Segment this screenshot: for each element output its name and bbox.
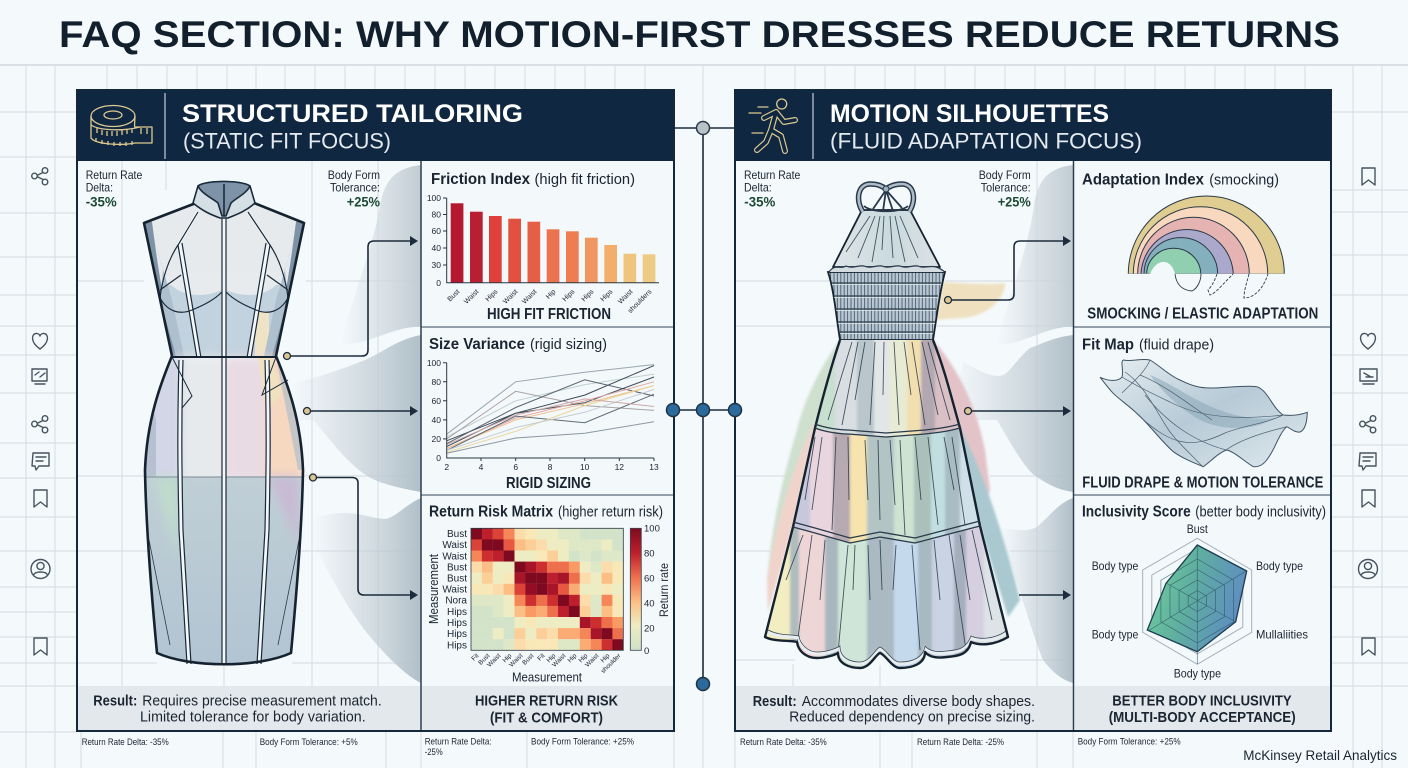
chart: friction index: 30 <box>432 260 441 270</box>
panel: structured tailoring <box>77 90 674 731</box>
source credit: McKinsey Retail Analytics <box>1243 747 1397 763</box>
header heading: MOTION SILHOUETTES <box>830 100 1109 128</box>
illustration: fit map: (fluid drape) <box>1139 336 1214 353</box>
chart: return risk matrix: 40 <box>644 598 655 610</box>
chart: size variance: 6 <box>513 462 518 472</box>
chart: return risk matrix: Hip <box>567 652 579 664</box>
chart: size variance: 10 <box>580 462 590 472</box>
chart: return risk matrix: Return rate <box>657 563 671 617</box>
chart: size variance <box>427 336 659 492</box>
chart: inclusivity score radar: Inclusivity Score <box>1082 504 1191 521</box>
chart: adaptation index: SMOCKING / ELASTIC ADAPTATION <box>1087 306 1318 323</box>
left margin icons <box>31 168 50 655</box>
chart: size variance: RIGID SIZING <box>506 475 591 492</box>
header heading <box>830 100 1142 153</box>
chart: return risk matrix: Bust <box>447 562 467 574</box>
chart: friction index <box>427 171 659 323</box>
chart: inclusivity score radar: Body type <box>1092 627 1139 641</box>
chart: return risk matrix: Waist <box>508 652 525 669</box>
chart: return risk matrix: Bust <box>447 574 467 584</box>
chart: return risk matrix: Waist <box>442 552 467 562</box>
illustration: structured dress <box>140 182 310 672</box>
chart: return risk matrix: Bust <box>477 652 492 667</box>
chart: return risk matrix: Bust <box>447 529 467 540</box>
chart: friction index: Hips <box>562 288 577 303</box>
chart: friction index: 60 <box>432 226 441 236</box>
chart: adaptation index: (smocking) <box>1209 171 1279 188</box>
chart: return risk matrix: Hips <box>447 629 467 640</box>
metric: return rate delta <box>86 168 143 210</box>
seam highlights <box>178 206 270 664</box>
chart: return risk matrix: Fit <box>536 652 547 663</box>
chart: return risk matrix: Hips <box>447 607 467 618</box>
verdict band right: BETTER BODY INCLUSIVITY <box>1112 693 1292 710</box>
result band right <box>736 686 1073 730</box>
metric: return rate delta: -35% <box>86 194 117 210</box>
seams <box>160 206 288 664</box>
chart: friction index: Hips <box>600 288 615 303</box>
footer metrics: Return Rate Delta: -35% <box>82 737 169 748</box>
footer metrics <box>82 736 1181 758</box>
chart: size variance: 60 <box>432 396 441 406</box>
footer metrics: Body Form Tolerance: +25% <box>1078 736 1181 747</box>
chart: friction index: Waist <box>521 288 538 306</box>
chart: return risk matrix: Hip <box>578 652 590 664</box>
chart: size variance: 8 <box>548 462 553 472</box>
chart: inclusivity score radar: Body type <box>1174 666 1221 680</box>
footer metrics: -25% <box>425 747 443 758</box>
chart: return risk matrix: Hips <box>447 640 467 652</box>
chart: return risk matrix: 20 <box>644 624 655 634</box>
chart: return risk matrix: Waist <box>442 540 467 551</box>
chart: return risk matrix: Bust <box>521 652 536 667</box>
chart: friction index: Hips <box>581 288 596 303</box>
result band left: Result: <box>93 694 137 710</box>
chart: friction index: Waist <box>463 288 480 306</box>
panel header <box>735 90 1331 161</box>
chart: return risk matrix: 0 <box>644 646 649 657</box>
bodice <box>833 210 940 267</box>
chart: friction index: 100 <box>427 193 441 203</box>
chart: friction index: Friction Index <box>431 171 530 188</box>
chart: return risk matrix: Fit <box>470 652 481 663</box>
result band right: Accommodates diverse body shapes. <box>802 694 1035 710</box>
callout connectors right <box>944 236 1071 600</box>
callout connectors left <box>284 236 418 600</box>
chart: return risk matrix: Hip <box>600 652 612 664</box>
chart: return risk matrix: Hip <box>502 652 514 664</box>
back layers <box>767 282 1020 617</box>
arcs <box>1128 196 1284 274</box>
halter neck <box>859 184 913 212</box>
icon: running figure <box>749 99 795 151</box>
chart: return risk matrix: Return Risk Matrix <box>429 504 553 521</box>
panel: motion silhouettes <box>735 90 1331 731</box>
chart: return risk matrix: Hips <box>447 618 467 629</box>
smocking band <box>828 266 945 340</box>
header heading: (FLUID ADAPTATION FOCUS) <box>830 128 1142 153</box>
metric: body form tolerance <box>328 168 381 210</box>
metric: body form tolerance: Tolerance: <box>981 180 1031 194</box>
chart: size variance: 20 <box>432 434 441 444</box>
icon: measuring tape <box>91 106 152 146</box>
chart: adaptation index <box>1082 171 1318 323</box>
illustration: fit map: FLUID DRAPE & MOTION TOLERANCE <box>1082 475 1323 492</box>
metric: body form tolerance: Body Form <box>328 168 380 182</box>
collar <box>193 182 255 218</box>
metric: return rate delta <box>744 168 801 210</box>
chart: friction index: Hip <box>545 288 557 301</box>
chart: size variance: 40 <box>432 415 441 425</box>
metric: body form tolerance <box>979 168 1031 210</box>
header heading: STRUCTURED TAILORING <box>182 100 523 128</box>
skirt tier two <box>794 429 978 542</box>
chart: friction index: Bust <box>447 288 461 303</box>
chart: friction index: 80 <box>432 210 441 220</box>
chart: size variance: 2 <box>444 462 449 472</box>
chart: return risk matrix: 80 <box>644 548 655 560</box>
result band right: Result: <box>753 694 797 710</box>
chart: return risk matrix: Waist <box>442 584 467 596</box>
chart: return risk matrix: 100 <box>644 524 660 534</box>
verdict band right: (MULTI-BODY ACCEPTANCE) <box>1109 709 1296 726</box>
chart: return risk matrix <box>427 504 671 684</box>
verdict band left: HIGHER RETURN RISK <box>475 693 618 710</box>
footer metrics: Return Rate Delta: -25% <box>917 737 1004 748</box>
chart: size variance: 80 <box>432 377 441 387</box>
chart: friction index: Waist <box>502 288 519 306</box>
chart: size variance: 0 <box>436 453 441 463</box>
chart: return risk matrix: Waist <box>486 652 503 669</box>
verdict band right <box>1075 686 1330 730</box>
right margin icons <box>1358 168 1378 655</box>
illustration: halter tiered dress <box>760 184 1020 675</box>
chart: friction index: Hips <box>485 288 500 303</box>
verdict band left <box>422 686 673 730</box>
chart: size variance: 4 <box>479 462 484 472</box>
chart: size variance: 13 <box>649 462 659 472</box>
header heading: (STATIC FIT FOCUS) <box>183 128 391 153</box>
result band left <box>78 686 421 730</box>
chart: inclusivity score radar: Bust <box>1187 522 1208 536</box>
metric: body form tolerance: Body Form <box>979 168 1031 182</box>
chart: inclusivity score radar: Body type <box>1092 559 1139 573</box>
metric: return rate delta: Delta: <box>86 180 113 194</box>
chart: return risk matrix: Measurement <box>512 670 582 684</box>
chart: size variance: Size Variance <box>429 336 525 353</box>
panel header <box>77 90 674 161</box>
chart: return risk matrix: shoulder <box>600 652 623 675</box>
chart: return risk matrix: 60 <box>644 574 655 584</box>
skirt tier one <box>816 340 958 436</box>
chart: return risk matrix: Nora <box>445 596 467 606</box>
chart: inclusivity score radar: (better body inclusivity) <box>1195 505 1326 521</box>
illustration: fit map: Fit Map <box>1082 336 1134 353</box>
chart: size variance: (rigid sizing) <box>530 336 607 353</box>
footer metrics: Body Form Tolerance: +5% <box>260 737 358 748</box>
metric: return rate delta: Return Rate <box>744 168 801 182</box>
chart: friction index: (high fit friction) <box>534 171 635 188</box>
chart: inclusivity score radar: Mullaliities <box>1256 627 1308 641</box>
title: FAQ SECTION: WHY MOTION-FIRST DRESSES REDUCE RETURNS <box>59 14 1340 55</box>
metric: return rate delta: -35% <box>744 194 776 210</box>
chart: inclusivity score radar <box>1082 504 1326 680</box>
chart: friction index: shoulders <box>627 288 654 315</box>
chart: friction index: 40 <box>432 243 441 253</box>
skirt tier three <box>766 527 1006 667</box>
chart: friction index: Waist <box>617 288 634 306</box>
chart: friction index: HIGH FIT FRICTION <box>487 306 611 323</box>
metric: body form tolerance: +25% <box>347 194 381 210</box>
chart: return risk matrix: Waist <box>584 652 601 669</box>
result band left: Requires precise measurement match. <box>142 694 382 710</box>
chart: adaptation index: Adaptation Index <box>1082 171 1204 188</box>
footer metrics: Return Rate Delta: <box>425 736 492 747</box>
subpanels column left <box>421 161 673 730</box>
chart: return risk matrix: Waist <box>551 652 568 669</box>
result band right: Reduced dependency on precise sizing. <box>789 710 1035 726</box>
chart: inclusivity score radar: Body type <box>1256 559 1303 573</box>
chart: return risk matrix: Measurement <box>427 554 441 624</box>
illustration: fit map <box>1082 336 1323 492</box>
chart: size variance: 12 <box>615 462 624 472</box>
metric: body form tolerance: Tolerance: <box>330 180 380 194</box>
verdict band left: (FIT & COMFORT) <box>490 709 603 726</box>
chart: return risk matrix: Hip <box>546 652 558 664</box>
metric: return rate delta: Delta: <box>744 180 772 194</box>
header heading <box>182 100 523 153</box>
footer metrics: Body Form Tolerance: +25% <box>531 736 634 747</box>
result band left: Limited tolerance for body variation. <box>140 710 366 726</box>
chart: friction index: 0 <box>436 278 441 288</box>
chart: size variance: 100 <box>427 358 441 368</box>
metric: body form tolerance: +25% <box>998 194 1031 210</box>
subpanels column right <box>1074 161 1330 730</box>
chart: return risk matrix: (higher return risk) <box>558 504 663 521</box>
metric: return rate delta: Return Rate <box>86 168 143 182</box>
center connector <box>666 122 742 690</box>
footer metrics: Return Rate Delta: -35% <box>740 737 827 748</box>
